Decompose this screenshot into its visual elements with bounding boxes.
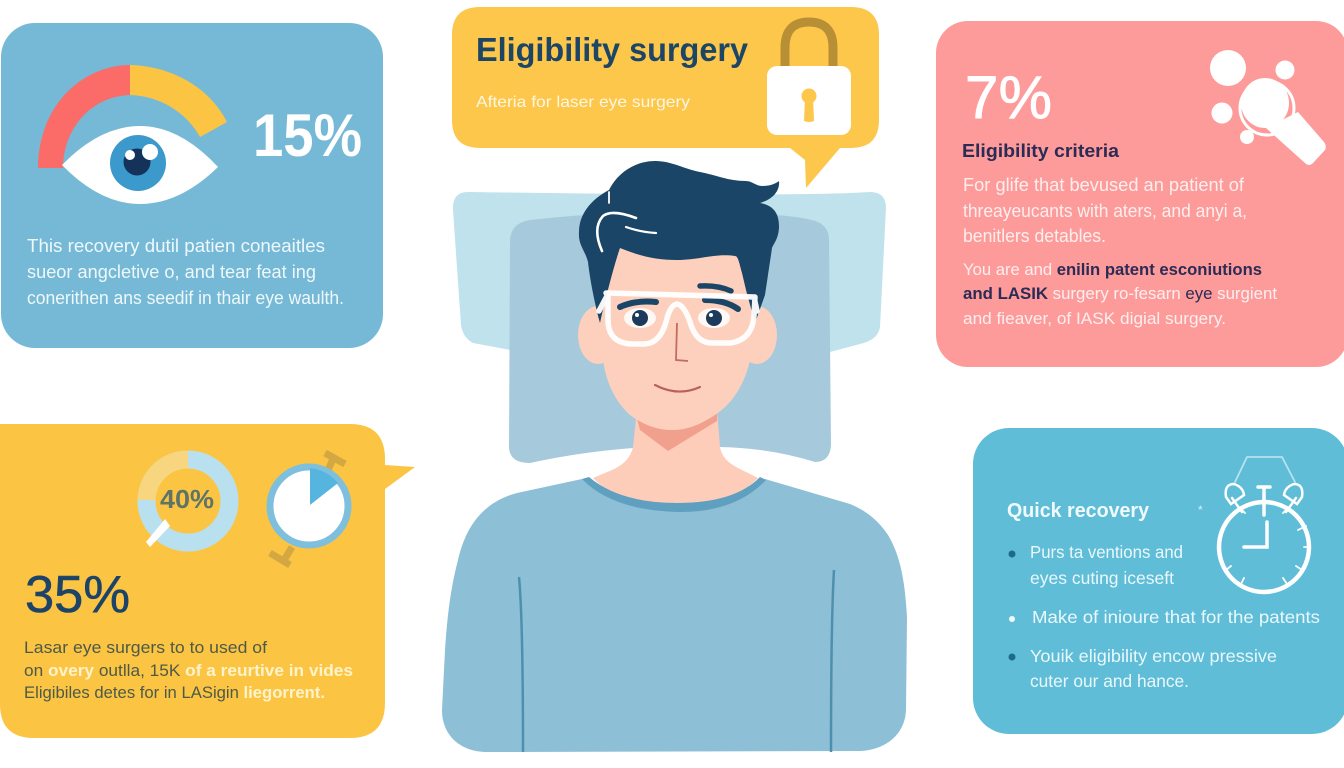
paragraph two: and fieaver, of IASK digial surgery. [963, 309, 1226, 328]
panel: recovery stat (blue, top left) [1, 23, 383, 348]
icon: alarm clock [1219, 457, 1309, 592]
front pillow [509, 212, 831, 463]
panel: quick recovery (teal, bottom right) [973, 428, 1344, 734]
right ear [737, 306, 777, 364]
panel: eligibility criteria (coral, top right) [936, 21, 1344, 367]
icon: stopwatch [270, 453, 348, 565]
bullet list: Purs ta ventions and [1030, 542, 1183, 562]
decorative star: * [1198, 503, 1203, 517]
illustration: patient lying on pillow [442, 161, 907, 752]
safety glasses [599, 293, 757, 344]
body text: on overy outlla, 15K of a reurtive in vides [24, 661, 353, 680]
neck shadow [636, 413, 717, 451]
subheading: Afteria for laser eye surgery [476, 94, 690, 111]
mouth [655, 385, 700, 392]
body text: sueor angcletive o, and tear feat ing [27, 262, 316, 282]
panel: LASIK statistics (yellow, bottom left) [0, 424, 415, 738]
bullet list [1008, 542, 1320, 691]
icon: padlock [767, 22, 851, 135]
paragraph two: and LASIK surgery ro-fesarn eye surgient [963, 284, 1277, 303]
nose [676, 323, 688, 361]
stat: 15%: 15% [253, 102, 362, 169]
patient torso in gown [442, 479, 907, 752]
body text [27, 236, 344, 308]
icon: magnifier with bubbles [1210, 50, 1326, 165]
face [603, 240, 752, 430]
body text [24, 638, 353, 702]
gown seam right [831, 570, 834, 752]
bullet list: eyes cuting iceseft [1030, 568, 1174, 588]
donut chart: 40%: 40% [160, 484, 214, 514]
left ear [578, 306, 618, 364]
gown seam left [519, 577, 523, 752]
body text: This recovery dutil patien coneaitles [27, 236, 325, 256]
stat: 7%: 7% [965, 64, 1052, 131]
icon: eye [62, 126, 218, 204]
bullet list: Make of inioure that for the patents [1032, 607, 1320, 627]
heading: Eligibility surgery [476, 31, 749, 68]
hair highlights [597, 192, 656, 251]
paragraph two: You are and enilin patent esconiutions [963, 260, 1262, 279]
neck and chest [593, 410, 758, 503]
stat: 35%: 35% [25, 566, 130, 624]
bullet list: cuter our and hance. [1030, 671, 1189, 691]
hair [579, 161, 779, 323]
body text: conerithen ans seedif in thair eye waulth. [27, 288, 344, 308]
eyebrows [620, 286, 738, 309]
gown collar [582, 477, 766, 512]
paragraph one: benitlers detables. [963, 226, 1106, 246]
paragraph one [963, 175, 1247, 246]
paragraph one: For glife that bevused an patient of [963, 175, 1245, 195]
panel: eligibility heading (yellow, top centre) [452, 7, 879, 188]
heading: Quick recovery [1007, 500, 1150, 522]
subheading: Eligibility criteria [962, 141, 1120, 161]
back pillow [453, 192, 886, 352]
paragraph one: threayeucants with aters, and anyi a, [963, 201, 1247, 221]
paragraph two [963, 260, 1277, 328]
donut chart: 40% [146, 460, 230, 547]
body text: Lasar eye surgers to to used of [24, 638, 267, 657]
gauge arc [38, 65, 227, 168]
bullet list: Youik eligibility encow pressive [1030, 646, 1277, 666]
body text: Eligibiles detes for in LASigin liegorrent. [24, 683, 325, 702]
eyes [624, 308, 730, 328]
